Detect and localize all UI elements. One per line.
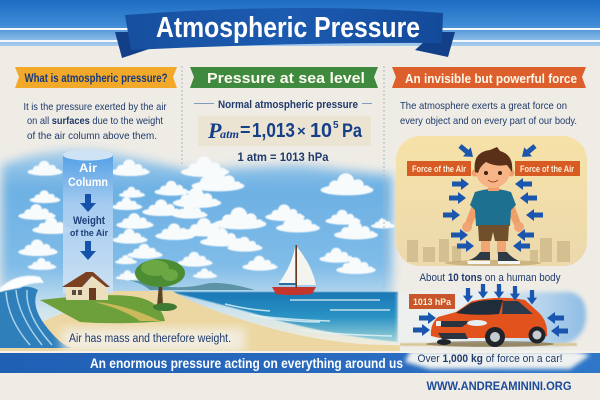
text: definition: on all surfaces due to the weight: [27, 115, 163, 127]
panel: what is atmospheric pressure: [15, 67, 177, 142]
text: normal atmospheric pressure: Normal atmospheric pressure: [218, 99, 358, 111]
formula: P: [207, 118, 222, 143]
wave: [0, 276, 72, 348]
hill with garden: [40, 295, 165, 323]
heading: invisible force: [392, 67, 586, 88]
boy: [445, 147, 541, 266]
text: force description: every object and on every part of our body.: [400, 115, 577, 127]
caption: ten tons: About 10 tons on a human body: [420, 272, 561, 284]
air column: Column: [68, 175, 108, 189]
heading: what is atmospheric pressure: What is atmospheric pressure?: [24, 71, 168, 85]
heading: pressure at sea level: [190, 67, 378, 88]
formula: atm: [220, 127, 239, 141]
text: definition: It is the pressure exerted by the air: [24, 101, 167, 113]
tree: [135, 259, 185, 311]
formula: [198, 116, 371, 146]
text: force description: [400, 100, 577, 127]
panel: pressure at sea level: [190, 67, 378, 164]
clouds: [18, 157, 395, 280]
website url: WWW.ANDREAMININI.ORG: [426, 381, 572, 393]
text: definition: [24, 101, 167, 142]
panel: invisible force: [392, 67, 586, 127]
air column: of the Air: [70, 228, 108, 238]
label: force of the air left: [407, 161, 471, 176]
title ribbon: [115, 8, 455, 58]
caption: car force: Over 1,000 kg of force on a car!: [418, 353, 562, 365]
heading: what is atmospheric pressure: [15, 67, 177, 88]
formula: Pa: [342, 121, 362, 142]
car: [426, 298, 554, 347]
caption: air has mass: [62, 328, 245, 352]
panel: car illustration: [398, 284, 586, 347]
top blue band: [0, 0, 600, 46]
sea: [170, 292, 398, 342]
formula: ×: [297, 123, 306, 140]
panel: boy illustration: [396, 136, 587, 266]
text: force description: The atmosphere exerts a great force on: [400, 100, 567, 112]
label: force of the air left: Force of the Air: [412, 164, 466, 174]
bottom banner: An enormous pressure acting on everything around us: [90, 356, 403, 371]
air column: Air: [79, 161, 97, 175]
arrows: force on boy: [443, 141, 543, 252]
dividers: [182, 66, 384, 290]
house: [62, 272, 110, 300]
formula: 1,013: [252, 120, 295, 142]
label: 1013 hPa: [409, 294, 455, 309]
distant hills: [114, 280, 255, 290]
heading: pressure at sea level: Pressure at sea level: [207, 71, 365, 87]
label: 1013 hPa: 1013 hPa: [413, 297, 452, 308]
text: 1 atm: 1 atm = 1013 hPa: [238, 150, 329, 164]
caption: air has mass: Air has mass and therefore weight.: [69, 333, 231, 345]
formula: =: [240, 120, 251, 140]
formula: 10: [310, 120, 332, 142]
heading: invisible force: An invisible but powerful force: [405, 71, 577, 86]
air column: Weight: [73, 215, 105, 227]
label: force of the air right: [515, 161, 580, 176]
beach: [0, 291, 400, 352]
label: force of the air right: Force of the Air: [520, 164, 574, 174]
sailboat: [272, 245, 316, 295]
bottom banner: [0, 351, 600, 373]
sky and sea scene: [0, 150, 400, 352]
air column: [63, 150, 113, 293]
city silhouette: [407, 238, 570, 262]
arrows: force on car: [413, 284, 568, 337]
formula: 5: [333, 120, 339, 131]
title ribbon: Atmospheric Pressure: [156, 12, 420, 44]
text: definition: of the air column above them.: [27, 130, 157, 142]
